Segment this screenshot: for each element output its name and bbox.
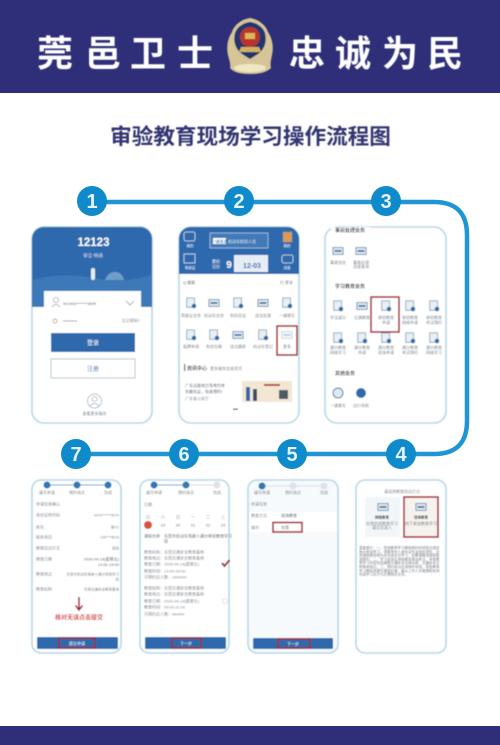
progress steps <box>39 482 112 495</box>
notice paragraph: 完成学习后方可办理相关业务。 <box>359 572 408 577</box>
detail rows: 身份证明号码 <box>36 512 60 518</box>
service icon grid <box>181 298 295 349</box>
date picker: 六 <box>161 514 165 520</box>
form rows: 城市 <box>251 524 259 530</box>
section: study and education: 现场申请 <box>378 349 394 355</box>
session two: 教育时间：09:00-11:00 <box>144 604 186 610</box>
banner slogan left: 士 <box>177 33 213 74</box>
section: accident handling <box>330 227 371 269</box>
section: study and education: 学习教育业务 <box>335 283 365 290</box>
notice paragraph: 地点参加学习，请携带本人身份证件及相关资料，迟 <box>359 549 440 554</box>
notice paragraph: 消预约，二、学习结束后请按要求参加考试，审验教 <box>359 556 440 561</box>
banner slogan right: 忠 <box>289 33 325 74</box>
licence score box <box>210 255 268 272</box>
login button <box>51 333 135 352</box>
date picker: 20 <box>176 522 181 528</box>
detail rows: 东莞市机动车驾驶人满分审验学习 <box>66 572 119 576</box>
notice paragraph: 温馨提示：一、现场教育学习需按预约时间到达指定 <box>359 545 440 550</box>
service icon grid: 机动车登记 <box>253 343 273 349</box>
step 2 marker <box>224 186 254 216</box>
progress steps: 完成 <box>104 489 112 495</box>
form rows <box>249 500 337 532</box>
date picker: 一 <box>191 514 195 520</box>
detail rows: 现场 <box>112 546 119 550</box>
notice box: 一键直通 <box>212 238 228 244</box>
register button <box>51 359 135 378</box>
highlight: on-site education <box>404 497 438 537</box>
section: study and education: 满分教育 <box>378 344 394 350</box>
banner slogan right: 诚 <box>335 33 371 74</box>
panel: step 2 home screen: 驾驶证 <box>185 265 196 270</box>
news section: 资讯中心 <box>187 365 207 372</box>
licence score box: 9 <box>226 260 232 271</box>
progress steps <box>254 482 328 495</box>
login card <box>44 291 141 363</box>
date picker: 19 <box>161 522 166 528</box>
progress steps: 完成 <box>320 489 328 495</box>
step 7 marker <box>61 439 91 469</box>
step 5 marker: 5 <box>286 444 298 466</box>
session two: 教育日期：2020-09-18(星期五) <box>144 598 200 604</box>
screen heading: 请选择教育培训方式 <box>384 488 420 494</box>
selected check mark <box>222 560 230 566</box>
option: on-site education: 现场教育 <box>414 514 428 520</box>
panel: step 1 login screen: 441900*******3605 <box>63 301 97 306</box>
course title: 班 <box>164 538 168 544</box>
section: other services: 一键挪车 <box>330 402 346 408</box>
panel: step 3 services list <box>325 227 446 423</box>
notice paragraph: 学习期间须遵守课堂纪律，服从工作人员管理和安排 <box>359 568 440 573</box>
section: other services: 其他业务 <box>335 370 355 377</box>
panel: step 1 login screen: 安全·畅通 <box>83 252 103 259</box>
service icon grid: 违法缴款 <box>230 343 246 349</box>
section: study and education: 满分教育 <box>402 344 418 350</box>
highlight: city <box>273 522 302 532</box>
section: study and education: 满分教育 <box>354 344 370 350</box>
session one: 教育日期：2020-09-18(星期五) <box>144 560 200 566</box>
detail rows: 教育培训方式 <box>36 544 60 550</box>
section: study and education: 满分教育 <box>330 344 346 350</box>
date picker: 二 <box>206 514 210 520</box>
arrow: points to submit <box>76 597 82 610</box>
banner slogan right: 为 <box>382 33 418 74</box>
progress steps: 预约场次 <box>178 489 194 495</box>
service icon grid: 更多 <box>283 343 291 349</box>
submit button <box>37 637 118 649</box>
detail rows: 4419*******5070 <box>94 514 119 518</box>
progress steps: 填写申请 <box>146 489 162 495</box>
news section <box>184 364 292 410</box>
form rows: 东莞 <box>281 524 289 530</box>
date picker: 日 <box>146 514 150 520</box>
date picker: 日 <box>176 514 180 520</box>
banner slogan right <box>289 33 463 74</box>
detail rows: 教育地点 <box>36 570 52 576</box>
banner slogan left: 莞 <box>37 33 73 74</box>
date picker: 23 <box>221 522 226 528</box>
service icon grid: 驾驶证业务 <box>181 312 201 318</box>
option: online education: 在线完成教育学习 <box>366 520 398 526</box>
course title: 东莞市机动车驾驶人满分审验教育学习 <box>164 532 232 538</box>
step 6 marker: 6 <box>178 444 190 466</box>
step 5 marker <box>277 439 307 469</box>
licence score box: 记分 <box>212 263 220 269</box>
date picker: 三 <box>221 514 225 520</box>
step 3 marker <box>371 186 401 216</box>
banner slogan left: 邑 <box>85 33 121 74</box>
option: online education: 请点击进入 <box>372 524 392 530</box>
progress steps: 完成 <box>213 489 221 495</box>
step 1 marker: 1 <box>86 191 98 213</box>
section: accident handling: 事前处理业务 <box>335 227 365 234</box>
news section: 广东省公安厅 <box>185 395 209 401</box>
panel: step 5 city selection <box>248 480 338 653</box>
section: study and education: 审验教育 <box>378 314 394 320</box>
service icon grid: 危险货运 <box>230 312 246 318</box>
section: accident handling: 事故处理 <box>353 259 369 265</box>
next button <box>253 638 333 649</box>
search bar: Q 搜索 <box>183 279 195 285</box>
notice paragraph: 明驾驶知识，三、预约成功后请按时到场，审验教育 <box>359 564 440 569</box>
session one <box>144 548 204 580</box>
banner slogan right: 民 <box>427 33 463 74</box>
form rows: 教育方式 <box>251 512 267 518</box>
detail rows: 班 <box>116 576 120 582</box>
course title <box>144 532 232 544</box>
date picker <box>144 514 226 529</box>
detail rows: 东莞交通安全教育基地 <box>84 586 119 592</box>
section: other services: 出行导航 <box>353 402 369 408</box>
step 4 marker: 4 <box>395 444 407 466</box>
panel: step 6 session selection <box>140 480 232 653</box>
panel: step 1 login screen: 忘记密码? <box>122 317 141 323</box>
detail rows: 姓名 <box>36 524 44 530</box>
register button: 注册 <box>87 365 99 373</box>
section: study and education: 审验教育 <box>402 314 418 320</box>
panel: step 2 home screen: 我的 <box>284 243 291 248</box>
session two: 教育地点：东莞交通安全教育基地 <box>144 590 204 596</box>
panel: step 1 login screen <box>32 227 152 423</box>
course title: 课程名称 <box>144 532 160 538</box>
session one: 可预约总人数：260/400 <box>144 574 187 580</box>
service icon grid: 违法处理 <box>255 312 271 318</box>
progress steps: 填写申请 <box>254 489 270 495</box>
detail rows: 教育机构 <box>36 586 52 592</box>
next button: 下一步 <box>287 640 299 646</box>
notice paragraph <box>359 545 440 577</box>
news section: 广东远故地方驾考约考 <box>185 382 225 388</box>
date picker: 22 <box>206 522 211 528</box>
session one: 教育地点：东莞交通安全教育基地 <box>144 554 204 560</box>
section: study and education: 网络学习 <box>330 349 346 355</box>
section: other services <box>330 370 369 408</box>
notice box: 机动车检验人员 <box>228 238 256 244</box>
news section: 名额充足，快来预约! <box>185 388 222 394</box>
section: study and education: 申请 <box>358 349 366 355</box>
highlight: education application <box>371 297 399 332</box>
section: study and education: 审验教育 <box>426 314 442 320</box>
detail rows: 2020-09-18(星期五) <box>84 556 120 562</box>
visitor avatar <box>82 394 106 416</box>
section: study and education: 申请 <box>382 319 390 325</box>
step 1 marker <box>77 186 107 216</box>
section: study and education: 学法减分 <box>330 314 346 320</box>
licence score box: 累积 <box>212 258 220 264</box>
detail rows: 136****8616 <box>100 536 119 540</box>
red instruction text: 核对无误点击提交 <box>55 614 103 622</box>
panel: step 7 confirm details <box>32 480 121 653</box>
banner slogan left <box>37 33 213 74</box>
session two: 教育机构：东莞交通安全教育基地 <box>144 584 204 590</box>
login button: 登录 <box>87 339 99 347</box>
notice paragraph: 到或缺席将视为未完成本次学习，如需调整请提前取 <box>359 553 440 558</box>
bottom banner <box>0 726 500 745</box>
banner slogan left: 卫 <box>130 33 166 74</box>
panel: step 1 login screen: •••••••••• <box>63 318 78 323</box>
section: study and education: 考试预约 <box>426 319 442 325</box>
step 6 marker <box>169 439 199 469</box>
visitor avatar: 查看更多服务 <box>82 410 106 416</box>
progress steps: 预约场次 <box>285 489 301 495</box>
highlight: more button <box>277 326 297 355</box>
detail rows: 黄XX <box>111 524 120 530</box>
option: on-site education: 线下参加教育学习 <box>405 520 437 526</box>
form rows: 申请信息 <box>251 500 267 506</box>
session one: 教育机构：东莞交通安全教育基地 <box>144 548 204 554</box>
police badge emblem <box>227 18 273 74</box>
service icon grid: 临牌申领 <box>183 343 199 349</box>
session two: 可预约总人数：96/400 <box>144 610 185 616</box>
panel: step 2 home screen: 消息 <box>284 265 291 270</box>
app logo 12123: 12123 <box>78 237 109 249</box>
progress steps: 预约场次 <box>69 489 85 495</box>
step 4 marker <box>386 439 416 469</box>
date picker: 21 <box>191 522 196 528</box>
option: on-site education <box>404 497 438 537</box>
option: online education <box>365 497 400 537</box>
notice box <box>210 233 268 248</box>
section: study and education: 网络申请 <box>402 319 418 325</box>
submit button: 提交申请 <box>69 640 85 646</box>
news section: 更多服务信息资讯 <box>210 365 242 371</box>
panel: step 2 home screen: 我的 <box>186 243 194 248</box>
step 3 marker: 3 <box>380 191 392 213</box>
section: accident handling: 进度查询 <box>353 263 369 269</box>
panel: step 2 home screen <box>179 227 299 423</box>
step 7 marker: 7 <box>70 444 82 466</box>
section: study and education: 网络学习 <box>426 349 442 355</box>
detail rows <box>36 500 120 592</box>
step 2 marker: 2 <box>233 191 245 213</box>
progress steps: 日期 <box>144 501 152 507</box>
title: 审验教育现场学习操作流程图 <box>110 124 391 149</box>
form rows: 现场教育 <box>281 512 297 518</box>
panel: step 2 home screen: 扫 更多 <box>280 279 293 285</box>
option: online education: 网络教育 <box>375 514 389 520</box>
session two <box>144 584 228 616</box>
section: study and education: 考试预约 <box>402 349 418 355</box>
licence score box: 12-03 <box>243 263 261 270</box>
header banner <box>0 0 500 93</box>
session one: 教育时间：14:00-16:00 <box>144 568 186 574</box>
next button <box>145 637 226 649</box>
detail rows: 14:00-16:00 <box>98 562 120 567</box>
progress steps <box>144 482 221 507</box>
section: study and education: 满分教育 <box>426 344 442 350</box>
progress steps: 填写申请 <box>39 489 55 495</box>
service icon grid: 机动车业务 <box>204 312 224 318</box>
detail rows: 申请信息确认 <box>36 500 60 506</box>
panel: step 4 education type <box>356 480 446 653</box>
notice paragraph: 育学习内容包括道路交通安全法律法规，交通安全文 <box>359 560 440 565</box>
service icon grid: 免检车辆 <box>206 343 222 349</box>
next button: 下一步 <box>180 640 192 646</box>
flow connector line <box>76 202 467 454</box>
service icon grid: 一键挪车 <box>279 312 295 318</box>
section: accident handling: 事故快处 <box>330 259 346 265</box>
detail rows: 教育日期 <box>36 556 52 562</box>
section: study and education: 记满教育 <box>354 314 370 320</box>
detail rows: 联系电话 <box>36 534 52 540</box>
section: study and education <box>330 283 442 355</box>
